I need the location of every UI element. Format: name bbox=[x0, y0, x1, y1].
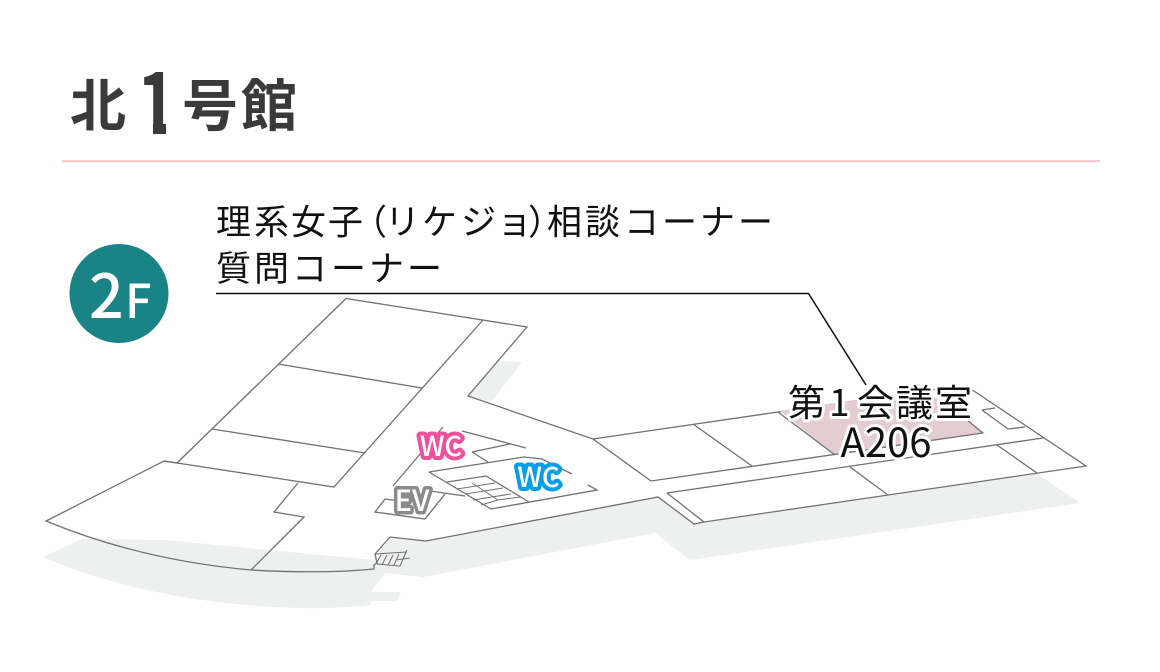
leader line bbox=[216, 294, 866, 385]
floor badge: 2F bbox=[70, 244, 168, 343]
title: 1 bbox=[137, 37, 177, 158]
floor shadow bbox=[43, 361, 1080, 608]
room label: A206 bbox=[841, 411, 931, 469]
heading: event names: 理系女子（リケジョ）相談コーナー bbox=[216, 194, 773, 246]
core: toilets and stairs bbox=[375, 427, 597, 519]
heading: event names bbox=[216, 194, 773, 292]
room label bbox=[788, 373, 972, 469]
west wing rooms bbox=[164, 320, 483, 570]
icon: women's toilet: WC bbox=[420, 424, 462, 464]
title: 北 bbox=[70, 62, 126, 143]
entrance stairs bbox=[375, 550, 410, 566]
building outline bbox=[46, 298, 1086, 572]
floor badge: 2F: 2 bbox=[89, 247, 124, 336]
floor plan bbox=[46, 298, 1086, 572]
title: 館 bbox=[241, 62, 297, 143]
highlighted room: 第1会議室 A206 bbox=[780, 390, 983, 455]
infographic canvas bbox=[44, 72, 1100, 608]
icon: elevator: EV bbox=[395, 478, 430, 520]
title bbox=[71, 72, 295, 134]
room label: 第1会議室 bbox=[788, 373, 972, 427]
icon: men's toilet: WC bbox=[517, 455, 560, 495]
title: 号 bbox=[182, 62, 238, 143]
east wing rooms bbox=[593, 408, 1043, 522]
stair treads bbox=[457, 483, 520, 505]
floor badge: 2F: F bbox=[125, 263, 152, 332]
heading: event names: 質問コーナー bbox=[216, 241, 442, 292]
